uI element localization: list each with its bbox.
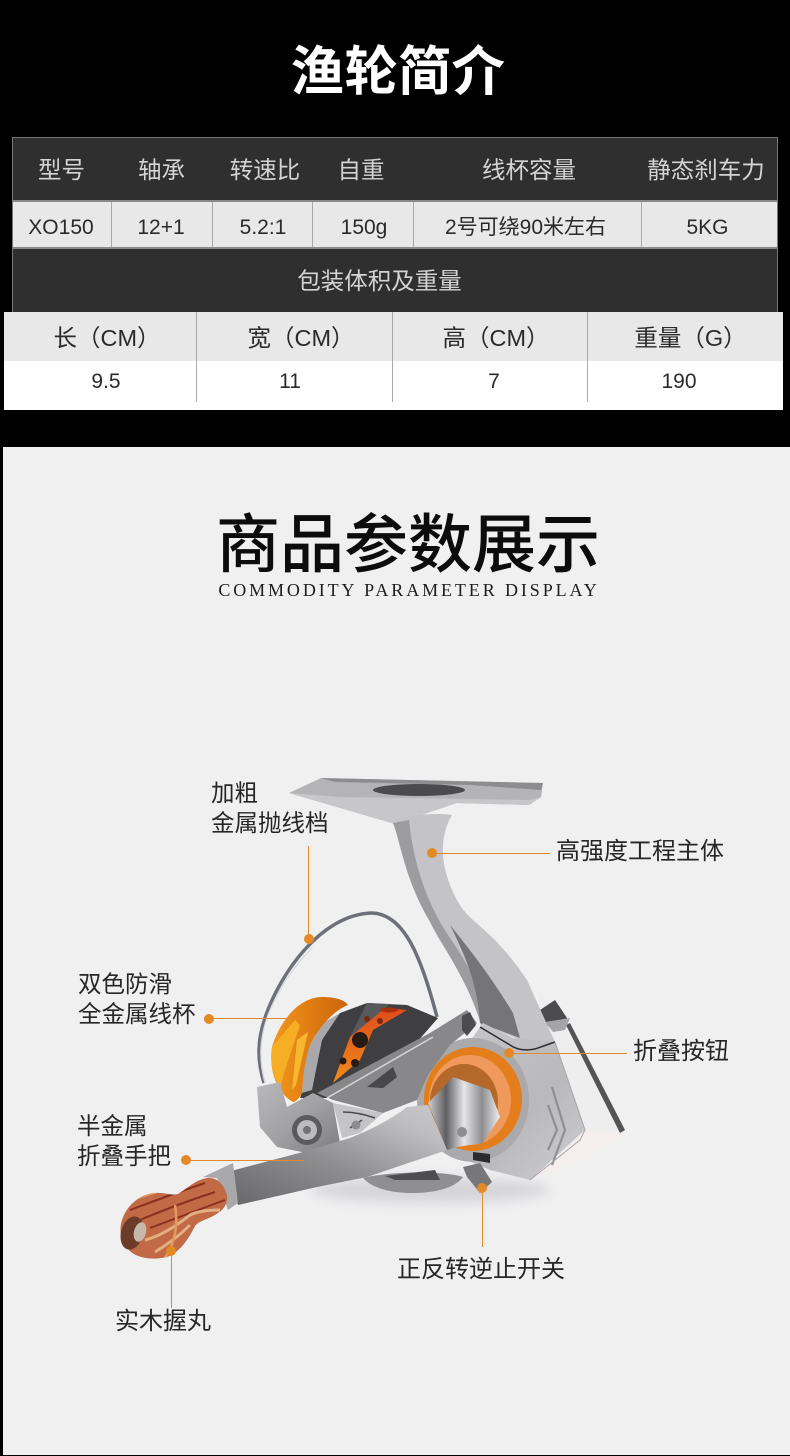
label: metal bail: 金属抛线档 bbox=[211, 810, 328, 836]
panel: package table bbox=[4, 312, 783, 410]
illustration: fishing reel with callout lines bbox=[120, 778, 627, 1308]
label: wooden knob: 实木握丸 bbox=[115, 1308, 211, 1335]
label: spool bbox=[78, 971, 196, 1026]
package header row: 宽（CM） bbox=[247, 325, 355, 351]
spec value row: 5.2:1 bbox=[240, 216, 286, 239]
spool bbox=[271, 997, 438, 1102]
spec value row: XO150 bbox=[28, 216, 94, 239]
callout lines bbox=[172, 846, 627, 1308]
under-body disc and anti-reverse lever bbox=[363, 1152, 492, 1193]
wooden knob bbox=[117, 1178, 227, 1259]
reel foot bbox=[289, 778, 543, 824]
spec value row: 150g bbox=[341, 216, 387, 239]
spec header row: 轴承 bbox=[138, 157, 185, 183]
package value row: 11 bbox=[279, 370, 301, 393]
spec value row: 2号可绕90米左右 bbox=[445, 216, 606, 239]
label: metal bail: 加粗 bbox=[211, 780, 258, 806]
package header row bbox=[4, 312, 783, 361]
package header row: 高（CM） bbox=[442, 325, 550, 351]
package value row: 9.5 bbox=[91, 370, 121, 393]
reel shadow bbox=[310, 1177, 550, 1203]
rotor arms bbox=[257, 1010, 477, 1153]
spec value row: 5KG bbox=[686, 216, 729, 239]
handle arm bbox=[203, 1105, 447, 1210]
package value row bbox=[91, 370, 697, 393]
spec header row: 转速比 bbox=[230, 157, 300, 183]
panel: product parameter background bbox=[3, 447, 790, 1455]
reel back plate bbox=[530, 990, 625, 1180]
stem and frame bbox=[393, 814, 585, 1180]
panel: specification table bbox=[12, 137, 778, 313]
title: 渔轮简介 bbox=[291, 43, 505, 102]
label: folding handle: 折叠手把 bbox=[77, 1142, 171, 1168]
package header row: 重量（G） bbox=[634, 325, 747, 351]
label: folding button: 折叠按钮 bbox=[633, 1038, 729, 1065]
spec header row: 型号 bbox=[38, 157, 85, 183]
label: anti-reverse switch: 正反转逆止开关 bbox=[397, 1256, 565, 1283]
spec header row: 静态刹车力 bbox=[647, 157, 765, 183]
label: high-strength body: 高强度工程主体 bbox=[556, 838, 724, 865]
package value row: 190 bbox=[661, 370, 697, 393]
package header row: 长（CM） bbox=[53, 325, 161, 351]
package value row: 7 bbox=[488, 370, 500, 393]
package heading: 包装体积及重量 bbox=[297, 268, 462, 294]
spec header row: 自重 bbox=[338, 157, 384, 183]
label: metal bail bbox=[211, 780, 328, 836]
spec header row: 线杯容量 bbox=[482, 157, 576, 183]
section heading: 商品参数展示 bbox=[216, 509, 600, 581]
spec header row bbox=[38, 157, 765, 183]
bail wire bbox=[259, 913, 437, 1083]
spec value row bbox=[13, 200, 777, 249]
label: folding handle: 半金属 bbox=[77, 1113, 148, 1139]
spec value row: 12+1 bbox=[137, 216, 185, 239]
callout dots bbox=[166, 848, 514, 1256]
section subtitle: COMMODITY PARAMETER DISPLAY bbox=[218, 580, 600, 600]
label: spool: 全金属线杯 bbox=[78, 1000, 196, 1026]
label: folding handle bbox=[77, 1113, 171, 1168]
rotor ring bbox=[417, 1038, 529, 1162]
label: spool: 双色防滑 bbox=[78, 971, 172, 997]
